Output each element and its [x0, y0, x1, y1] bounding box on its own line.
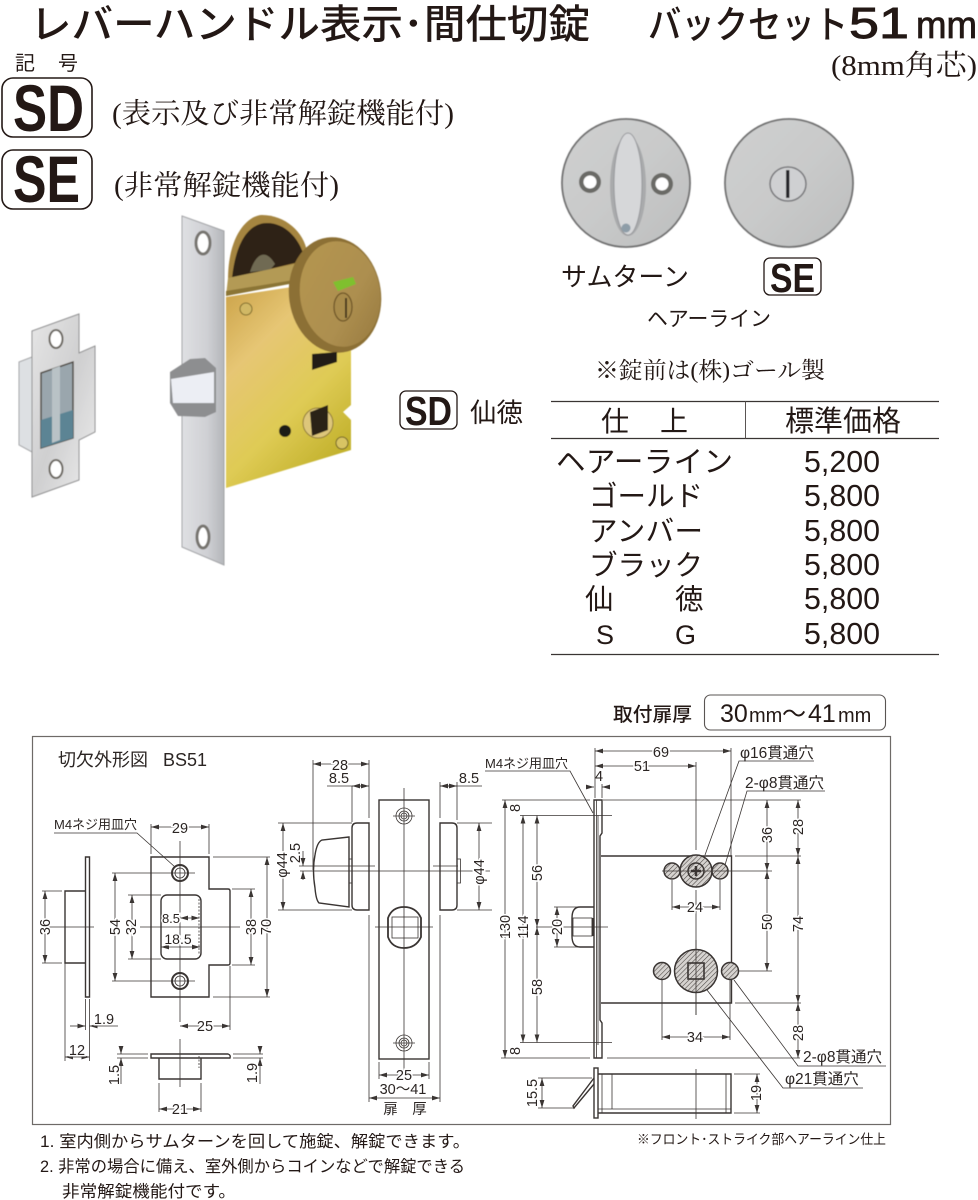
table header: 標準価格	[785, 405, 901, 438]
badge: SD: SD	[13, 71, 84, 145]
finish names: ヘアーライン	[556, 446, 733, 479]
drawing: mortise bottom view: 19	[749, 1085, 765, 1101]
symbol label: 記	[15, 53, 35, 75]
dimensions: mortise vertical left: 130	[498, 915, 514, 939]
panel heading: BS51	[163, 750, 207, 770]
finish names: S	[596, 620, 614, 650]
drawing: outer rose side view: 8.5	[459, 771, 479, 787]
drawing: strike front view: 54	[108, 919, 124, 935]
drawing: strike front view: 25	[197, 1019, 213, 1035]
finish names	[556, 446, 733, 650]
drawing: front plate: 25	[396, 1068, 412, 1084]
table header	[601, 405, 901, 438]
subtitle: square spindle size: (8mm角芯)	[831, 49, 977, 82]
drawing: hole sections: 24	[687, 900, 703, 916]
finish names: ブラック	[589, 550, 703, 582]
thumbturn label: サムターン	[561, 262, 689, 292]
dimensions: mortise vertical left: 58	[530, 979, 546, 995]
table header: 上	[660, 406, 688, 437]
dimensions: mortise horizontal: 4	[595, 769, 603, 785]
finish names: 仙	[585, 584, 614, 616]
prices: 5,800	[804, 478, 880, 513]
drawing: strike side view	[38, 857, 118, 1061]
drawing: thumbturn side view	[275, 758, 490, 910]
drawing: strike front view: 38	[244, 919, 260, 935]
door thickness value box: ～	[782, 701, 806, 728]
finish names: 徳	[675, 584, 704, 616]
callout: phi21 through hole: φ21貫通穴	[785, 1070, 859, 1088]
drawing: strike bottom view: 1.9	[245, 1063, 261, 1083]
door thickness value box: mm	[838, 705, 871, 727]
table header: 仕	[601, 406, 629, 437]
callout: phi16 through hole: φ16貫通穴	[740, 744, 814, 762]
maker note: ※錠前は(株)ゴール製	[595, 358, 825, 383]
finish names: G	[675, 620, 696, 650]
callout: phi21 through hole	[707, 990, 863, 1088]
price table	[551, 402, 939, 654]
callout: 2-phi8 through holes (lower)	[734, 980, 886, 1066]
photo: mortise lock	[170, 215, 389, 565]
dimensions: mortise vertical right: 74	[791, 916, 807, 932]
badge: SD small: SD	[405, 388, 452, 434]
drawing: thumbturn side view: 28	[332, 758, 348, 774]
drawing: strike side view: 36	[38, 919, 54, 935]
drawing: thumbturn side view: φ44	[275, 852, 291, 878]
dimensions: mortise vertical left: 20	[550, 919, 566, 935]
prices: 5,800	[804, 616, 880, 651]
callout: M4 countersunk hole (mortise): M4ネジ用皿穴	[485, 756, 568, 771]
callout: M4 countersunk hole (strike): M4ネジ用皿穴	[54, 817, 137, 832]
photo: strike plate	[19, 314, 95, 497]
dimensions: mortise vertical left: 8	[508, 1047, 524, 1055]
dimensions: mortise vertical right: 28	[791, 1025, 807, 1041]
prices: 5,800	[804, 581, 880, 616]
usage notes: 1. 室内側からサムターンを回して施錠、解錠できます。	[40, 1132, 470, 1151]
prices: 5,800	[804, 513, 880, 548]
title: バックセット	[648, 5, 848, 47]
finish note: ※フロント･ストライク部ヘアーライン仕上	[637, 1132, 886, 1147]
drawing: strike front view: 32	[124, 919, 140, 935]
drawing: strike front view: 8.5	[162, 911, 180, 926]
callout: M4 countersunk hole (strike)	[54, 817, 175, 867]
panel heading: 切欠外形図	[58, 750, 148, 770]
dimensions: mortise vertical right: 50	[760, 914, 776, 930]
symbol label	[15, 53, 78, 75]
drawing: hole sections	[654, 855, 772, 1046]
panel: cutout dimension drawings	[32, 736, 890, 1124]
drawing: hole sections: 34	[687, 1030, 703, 1046]
finish names: ゴールド	[589, 481, 703, 513]
title: mm	[916, 5, 977, 47]
callout: M4 countersunk hole (mortise)	[485, 756, 593, 813]
photo: thumbturn escutcheon	[562, 119, 690, 247]
drawing: strike front view	[108, 821, 275, 1035]
finish label: sentoku: 仙徳	[470, 398, 523, 428]
drawing: front plate: 30～41	[380, 1082, 426, 1098]
drawing: strike bottom view	[107, 1039, 263, 1118]
drawing: mortise bottom view	[525, 1068, 765, 1119]
dimensions: mortise vertical left	[498, 800, 612, 1058]
drawing: strike front view: 18.5	[164, 931, 192, 947]
drawing: outer rose side view	[440, 771, 492, 910]
dimensions: mortise vertical left: 56	[530, 865, 546, 881]
prices: 5,200	[804, 444, 880, 479]
symbol label: 号	[58, 53, 78, 75]
drawing: thumbturn side view: 8.5	[329, 771, 349, 787]
title: 51	[849, 0, 909, 48]
drawing: mortise case side view	[536, 762, 732, 1058]
drawing: strike side view: 1.9	[94, 1012, 114, 1028]
door thickness value box	[704, 695, 886, 730]
drawing: mortise bottom view: 15.5	[525, 1079, 541, 1107]
description: SD: (表示及び非常解錠機能付)	[112, 98, 454, 130]
prices: 5,800	[804, 547, 880, 582]
callout: 2-phi8 through holes (upper): 2-φ8貫通穴	[745, 774, 824, 792]
dimensions: mortise vertical right: 36	[760, 827, 776, 843]
drawing: strike side view: 12	[69, 1043, 85, 1059]
dimensions: mortise horizontal	[587, 745, 731, 856]
drawing: front plate: 扉 厚	[383, 1102, 427, 1118]
prices	[804, 444, 880, 651]
callout: 2-phi8 through holes (lower): 2-φ8貫通穴	[803, 1048, 882, 1066]
door thickness value box: 30	[720, 700, 748, 728]
callout: 2-phi8 through holes (upper)	[725, 774, 825, 865]
title: レバーハンドル表示･間仕切錠	[30, 3, 590, 47]
badge: SE small: SE	[770, 255, 815, 301]
drawing: strike bottom view: 1.5	[107, 1065, 123, 1085]
hairline finish label: ヘアーライン	[647, 308, 771, 331]
badge: SE: SE	[13, 142, 80, 216]
drawing: strike front view: 70	[259, 919, 275, 935]
dimensions: mortise vertical right	[603, 800, 807, 1058]
door thickness value box: 41	[808, 700, 836, 728]
title	[30, 0, 977, 48]
drawing: strike front view: 29	[172, 821, 188, 837]
drawing: thumbturn side view: 2.5	[288, 843, 304, 863]
usage notes	[40, 1132, 470, 1200]
finish names: アンバー	[589, 516, 703, 548]
dimensions: mortise vertical left: 8	[508, 804, 524, 812]
drawing: front plate	[369, 788, 440, 1118]
dimensions: mortise horizontal: 51	[634, 759, 650, 775]
photo: coin release escutcheon	[725, 119, 853, 247]
usage notes: 2. 非常の場合に備え、室外側からコインなどで解錠できる	[40, 1157, 465, 1176]
dimensions: mortise vertical right: 28	[791, 819, 807, 835]
description: SE: (非常解錠機能付)	[114, 170, 339, 202]
door thickness label: 取付扉厚	[613, 704, 692, 726]
dimensions: mortise horizontal: 69	[653, 745, 669, 761]
callout: phi16 through hole	[705, 744, 814, 855]
drawing: outer rose side view: φ44	[472, 859, 488, 885]
drawing: strike bottom view: 21	[172, 1102, 188, 1118]
door thickness value box: mm	[749, 705, 782, 727]
dimensions: mortise vertical left: 114	[516, 915, 532, 939]
